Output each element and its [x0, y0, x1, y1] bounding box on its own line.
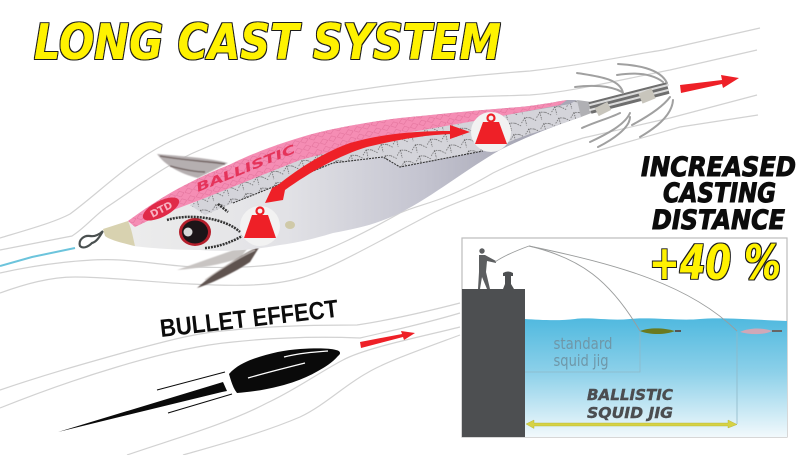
ballistic jig [740, 328, 782, 334]
title: LONG CAST SYSTEM [34, 14, 501, 71]
increased casting distance heading: DISTANCE [652, 205, 785, 236]
brand name: BALLISTIC [194, 142, 298, 195]
brand mark [140, 193, 182, 225]
lower fins [177, 243, 260, 288]
brand mark: DTD [149, 200, 175, 221]
speed lines [157, 372, 232, 413]
rig shank [590, 88, 668, 108]
diagram frame [462, 238, 787, 437]
rig base [577, 100, 594, 117]
standard jig [640, 328, 681, 334]
pink back band [128, 100, 567, 227]
water [525, 318, 787, 437]
distance guide lines [525, 332, 737, 424]
bullet effect heading: BULLET EFFECT [159, 295, 340, 343]
standard squid jig label [554, 334, 612, 370]
direction arrow bullet [360, 331, 415, 348]
standard squid jig label: standard [554, 334, 612, 353]
hook rig [575, 64, 673, 147]
fishing line leader [0, 248, 75, 266]
line swivel ring [80, 231, 103, 247]
top fin [157, 154, 228, 178]
nose cap [103, 221, 135, 246]
increased casting distance heading: CASTING [663, 178, 776, 209]
bullet head [229, 348, 340, 393]
weight icon rear [471, 112, 511, 152]
bullet icon [58, 348, 340, 432]
double-headed mass shift arrow [265, 125, 470, 203]
weight icon front [240, 206, 280, 246]
rod and cast lines [495, 246, 737, 331]
eye [179, 218, 211, 246]
ballistic squid jig label: BALLISTIC [587, 386, 673, 404]
lateral line [233, 151, 483, 203]
ballistic squid jig label: SQUID JIG [587, 404, 673, 422]
pier [462, 289, 525, 437]
direction arrow top [680, 75, 739, 93]
standard squid jig label: squid jig [554, 351, 608, 370]
bullet highlight [248, 351, 328, 378]
jig body [103, 100, 581, 251]
grey scale pattern [190, 100, 581, 215]
glow spot [285, 221, 295, 229]
collars [601, 91, 649, 113]
bullet tail [58, 382, 227, 432]
bollard [503, 272, 514, 289]
eye brow markings [167, 204, 242, 248]
increased casting distance heading [641, 152, 796, 236]
squid jig lure [0, 64, 673, 288]
yellow distance arrow [526, 420, 737, 428]
casting distance diagram [462, 236, 787, 437]
ballistic squid jig label [587, 386, 673, 422]
angler silhouette [478, 248, 496, 289]
hook crowns [575, 64, 673, 147]
